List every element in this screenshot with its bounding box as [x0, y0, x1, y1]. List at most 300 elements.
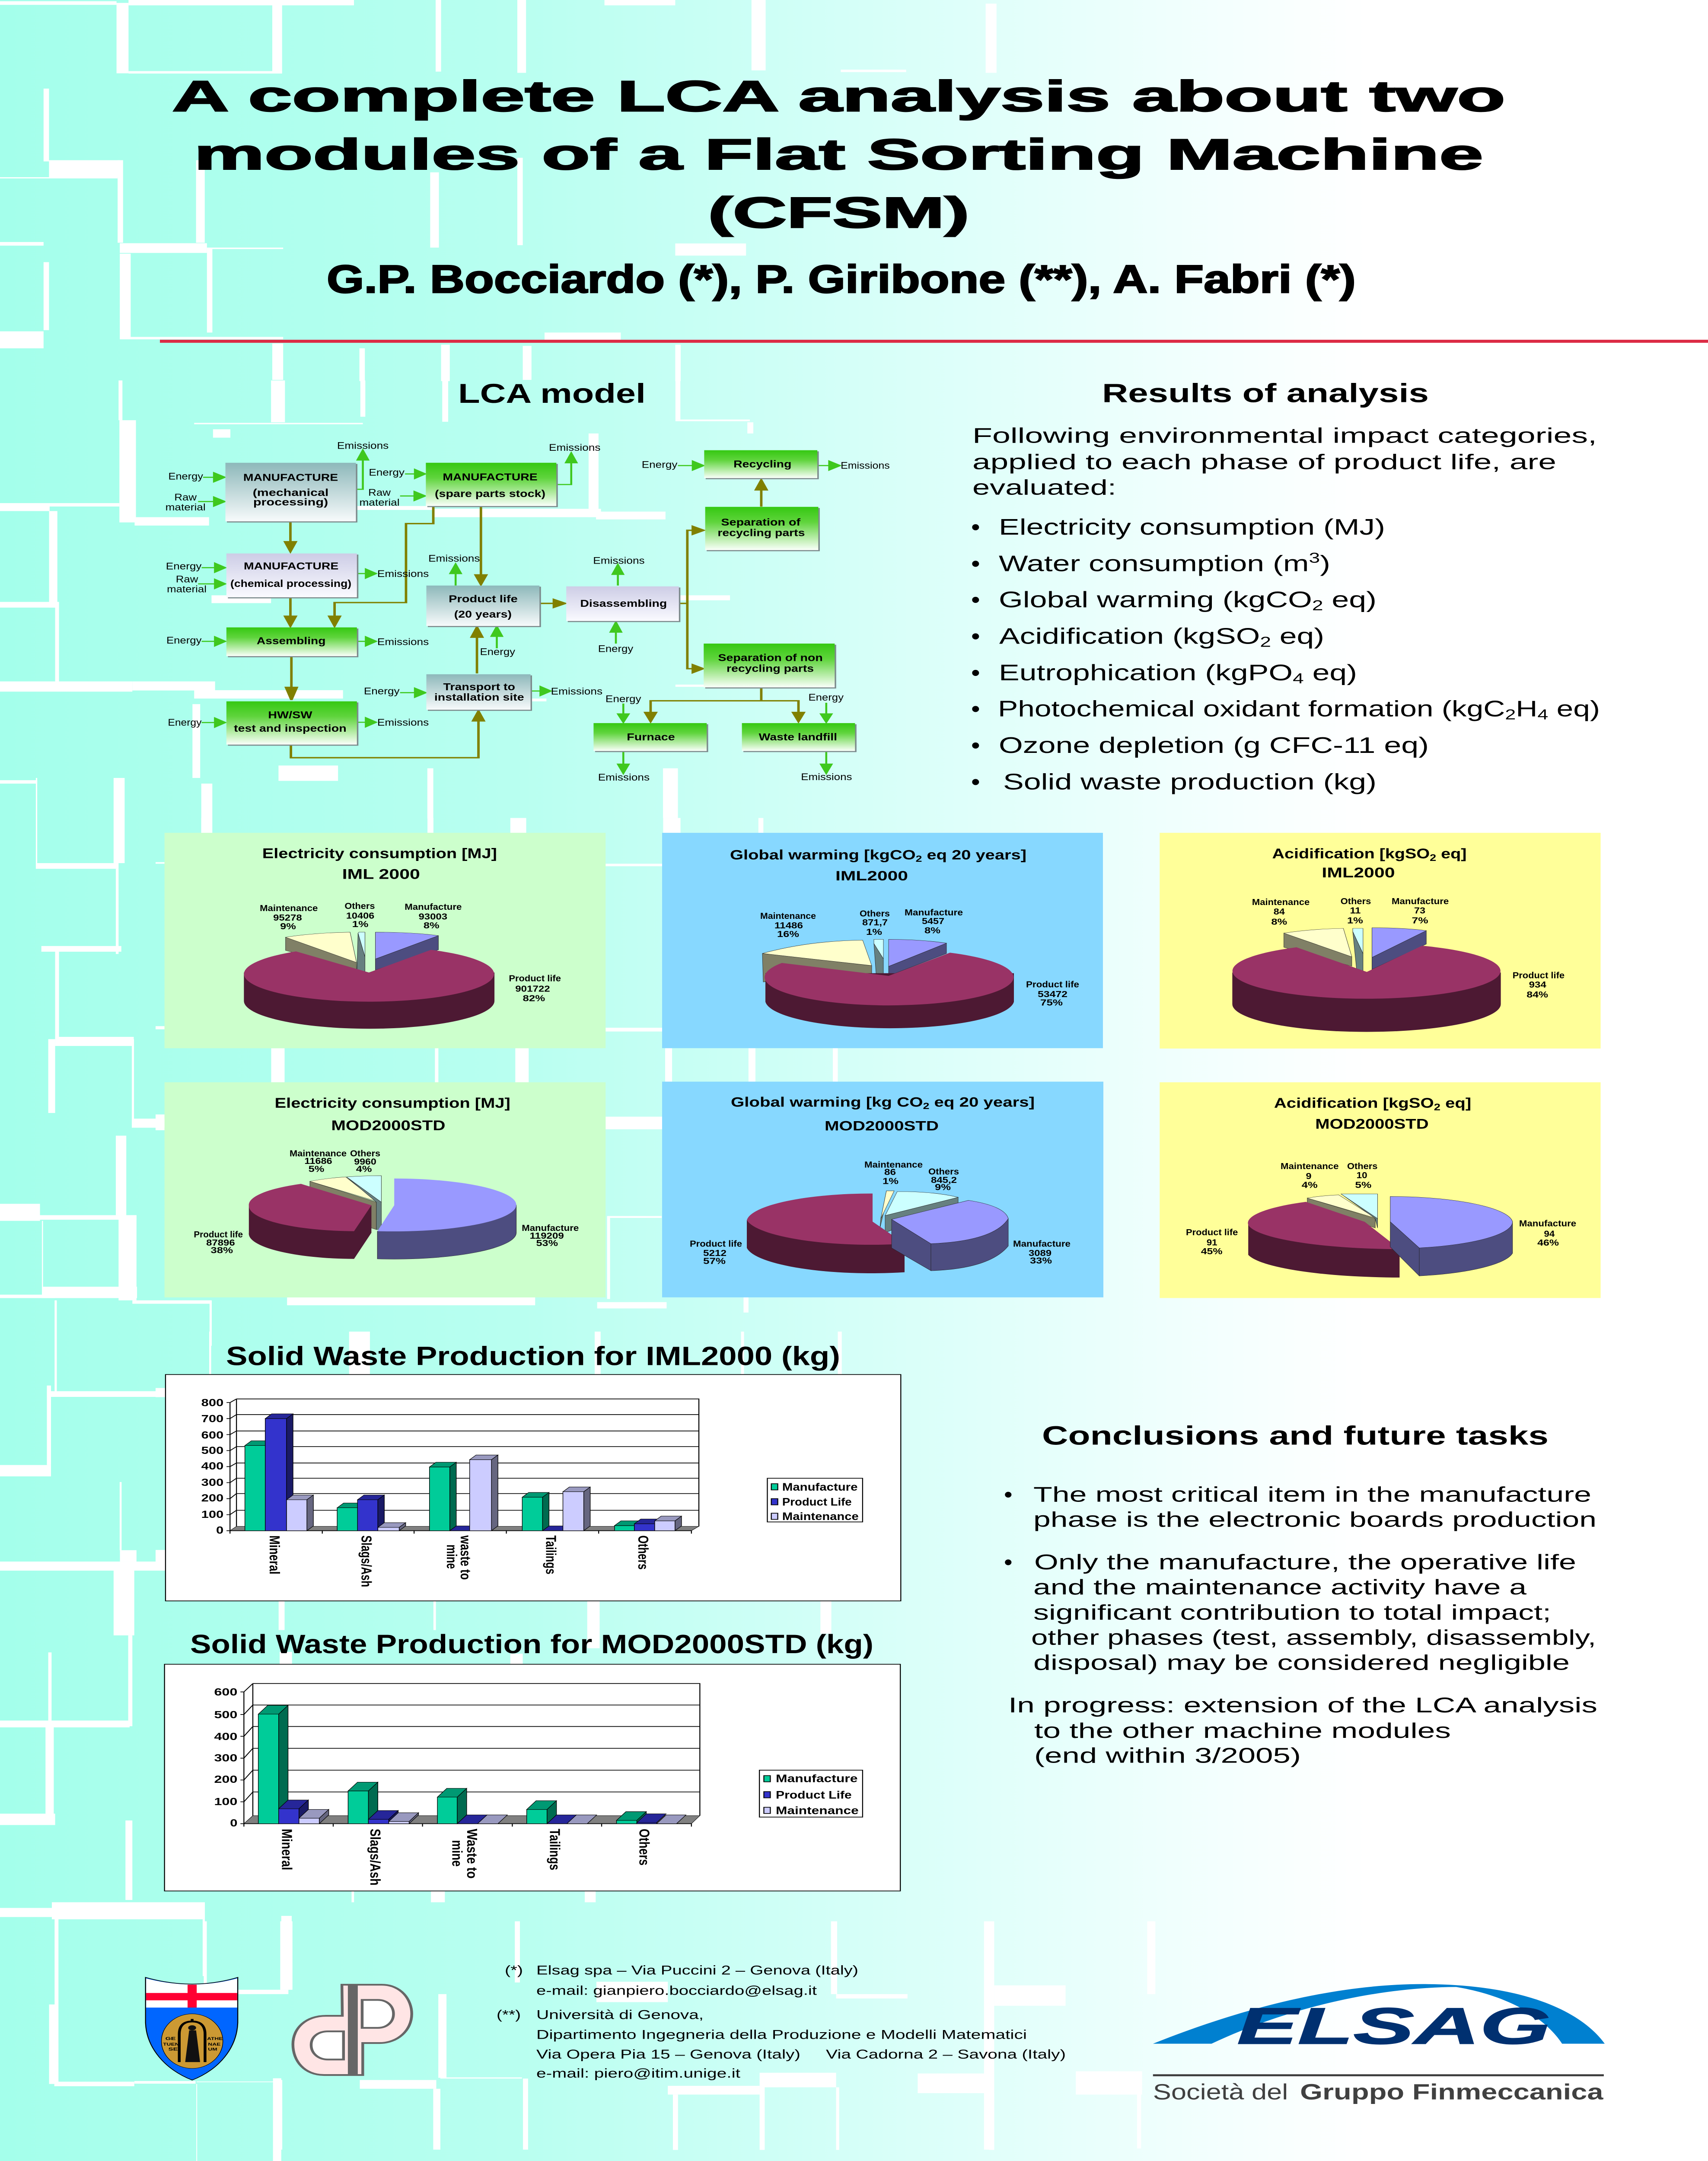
footer: affiliations: (**) — [497, 2008, 521, 2022]
legend: Product Life — [776, 1789, 852, 1801]
box: waste landfill: Waste landfill — [759, 732, 837, 743]
footer: affiliations: Elsag spa – Via Puccini 2 – Genova (Italy) — [536, 1963, 858, 1977]
data labels: 9 — [1306, 1172, 1312, 1181]
box: transport — [427, 674, 532, 711]
bar chart: solid waste IML2000 — [166, 1374, 901, 1601]
category labels: Mineral — [266, 1536, 282, 1575]
panel: global warming MOD2000STD — [662, 1082, 1103, 1297]
box: transport: installation site — [434, 692, 524, 703]
legend: Manufacture — [782, 1481, 857, 1493]
flow labels: energy and raw material: material — [166, 502, 206, 513]
bars: maintenance — [299, 1810, 686, 1823]
arrow: transport emissions — [531, 687, 551, 695]
box: manufacture mechanical — [226, 463, 357, 523]
panel: results of analysis — [971, 378, 1600, 794]
conclusions text: disposal) may be considered negligible — [1033, 1651, 1570, 1675]
logo: university of Genova shield: NAE — [208, 2043, 221, 2046]
impact category list: • — [971, 587, 980, 612]
conclusions text: and the maintenance activity have a — [1033, 1575, 1527, 1599]
y axis labels: 800 — [201, 1397, 223, 1409]
panel: electricity MOD2000STD — [165, 1082, 605, 1297]
data labels: Maintenance — [864, 1160, 923, 1170]
arrow: energy to chemical manufacture — [201, 563, 226, 572]
category labels: mine — [449, 1840, 465, 1867]
impact category list: • — [971, 733, 980, 758]
flowchart: LCA model — [166, 440, 890, 783]
chart title: IML 2000 — [342, 867, 420, 882]
y axis labels — [214, 1686, 237, 1829]
title: modules of a Flat Sorting Machine — [194, 130, 1483, 178]
footer: affiliations: Università di Genova, — [536, 2008, 704, 2022]
logo: ELSAG: ELSAG — [1237, 1997, 1551, 2055]
category labels: mine — [443, 1545, 459, 1569]
data labels — [1252, 896, 1565, 1000]
box: separation of non recycling parts: Separation of non — [718, 653, 823, 663]
data labels: 871,7 — [862, 917, 888, 928]
category labels: Mineral — [279, 1829, 294, 1870]
flow labels: energy and raw material: Energy — [808, 692, 844, 703]
legend — [767, 1478, 863, 1523]
y axis labels: 200 — [201, 1492, 223, 1504]
data labels — [194, 1148, 579, 1255]
box: separation of recycling parts — [705, 507, 820, 551]
impact category list: • — [971, 769, 980, 794]
panel: global warming IML2000 — [662, 833, 1103, 1048]
data labels: 84 — [1274, 907, 1285, 917]
category labels: Others — [636, 1829, 652, 1865]
flow labels: energy and raw material: Energy — [605, 694, 641, 704]
data labels: 1% — [883, 1176, 899, 1186]
data labels: Others — [1347, 1161, 1377, 1171]
impact category list: Ozone depletion (g CFC-11 eq) — [999, 733, 1429, 758]
category labels: Others — [635, 1536, 651, 1570]
flow labels: energy and raw material: Energy — [166, 635, 202, 646]
data labels: Others — [860, 908, 890, 918]
box: disassembling — [566, 586, 680, 622]
box: hardware test: HW/SW — [268, 710, 312, 721]
data labels: 8% — [924, 925, 940, 935]
impact category list: 4 — [1293, 670, 1304, 686]
arrow: energy to assembling — [201, 637, 226, 646]
heading: results of analysis: Results of analysis — [1102, 378, 1429, 408]
arrow: transport to product life — [472, 627, 482, 673]
chart title: IML2000 — [1322, 865, 1395, 880]
box: recycling — [704, 450, 819, 479]
data labels: 934 — [1529, 980, 1546, 990]
flow labels: emissions: Emissions — [593, 555, 645, 566]
data labels: 4% — [1302, 1180, 1318, 1190]
logo: ELSAG — [1153, 1984, 1605, 2104]
category labels: Slags/Ash — [358, 1536, 374, 1587]
data labels: Maintenance — [290, 1148, 347, 1158]
data labels: 8% — [424, 921, 440, 931]
chart title — [730, 848, 1026, 883]
data labels: Maintenance — [1252, 898, 1310, 907]
conclusions text: In progress: extension of the LCA analysis — [1008, 1693, 1597, 1717]
data labels: 33% — [1030, 1256, 1052, 1265]
data labels — [1186, 1161, 1576, 1256]
arrow: chemical manufacture to assembling — [285, 597, 296, 626]
legend: Maintenance — [782, 1511, 859, 1523]
conclusions text: • — [1004, 1550, 1013, 1574]
chart title: eq] — [1436, 846, 1466, 861]
bars: product life — [279, 1800, 666, 1823]
data labels: 5% — [309, 1164, 324, 1174]
pie chart — [747, 1191, 1008, 1273]
chart title: 2 — [916, 854, 922, 864]
chart title: eq 20 years] — [929, 1095, 1035, 1110]
data labels: 82% — [523, 993, 545, 1003]
data labels: 10406 — [346, 911, 374, 921]
data labels: Product life — [509, 973, 561, 983]
box: manufacture mechanical: (mechanical — [253, 487, 328, 498]
data labels: Product life — [194, 1230, 243, 1240]
data labels: Manufacture — [1519, 1219, 1576, 1228]
footer: affiliations — [497, 1963, 1066, 2081]
box: separation of recycling parts: Separation of — [721, 517, 801, 528]
data labels: 46% — [1537, 1238, 1559, 1248]
authors: G.P. Bocciardo (*), P. Giribone (**), A. Fabri (*) — [327, 257, 1356, 301]
impact category list: 4 — [1537, 707, 1548, 723]
data labels — [690, 1160, 1071, 1266]
chart title: MOD2000STD — [1315, 1116, 1429, 1132]
chart title: 2 — [1430, 852, 1436, 863]
data labels: 94 — [1544, 1229, 1555, 1239]
arrow: energy to recycling — [678, 461, 704, 470]
legend: Maintenance — [776, 1805, 859, 1817]
arrow: raw material to spare parts — [400, 491, 425, 500]
conclusions text — [1004, 1483, 1597, 1768]
y axis labels: 100 — [201, 1509, 223, 1520]
y axis labels: 0 — [216, 1524, 223, 1536]
intro text: evaluated: — [972, 475, 1116, 500]
chart title: Global warming [kgCO — [730, 848, 898, 863]
y axis labels: 500 — [214, 1709, 237, 1721]
heading: LCA model: LCA model — [458, 379, 646, 409]
flow labels: energy and raw material: Energy — [166, 561, 202, 571]
y axis labels: 600 — [201, 1430, 223, 1441]
chart title: eq 20 years] — [922, 848, 1026, 863]
arrow: energy to product life — [491, 627, 502, 648]
data labels: Manufacture — [1013, 1239, 1071, 1249]
data labels: 119209 — [530, 1231, 564, 1241]
box: manufacture mechanical: processing) — [253, 497, 328, 508]
flow labels: emissions: Emissions — [801, 771, 852, 782]
box: hardware test — [226, 701, 358, 746]
arrow: spare parts to assembling — [329, 506, 433, 626]
y axis labels: 100 — [214, 1796, 237, 1807]
logo: university of Genova shield: UM — [208, 2048, 217, 2052]
flow labels: energy and raw material: Energy — [480, 646, 515, 657]
chart title — [1274, 1095, 1471, 1132]
data labels: 53472 — [1038, 989, 1068, 999]
header rule — [160, 340, 1708, 343]
data labels: 11686 — [304, 1156, 332, 1166]
impact category list: eq) — [1271, 624, 1324, 649]
conclusions text: other phases (test, assembly, disassembly, — [1031, 1626, 1596, 1650]
flow labels: energy and raw material — [166, 459, 844, 728]
conclusions text: phase is the electronic boards production — [1033, 1508, 1596, 1532]
arrow: separation to recycling — [756, 480, 767, 507]
data labels: Maintenance — [760, 911, 816, 921]
y axis labels: 400 — [201, 1460, 223, 1472]
data labels: 84% — [1526, 990, 1548, 1000]
data labels: 9960 — [354, 1157, 376, 1167]
legend: Manufacture — [776, 1773, 857, 1785]
pie chart — [1248, 1194, 1513, 1278]
footer: affiliations: Via Opera Pia 15 – Genova (Italy) — [536, 2047, 800, 2062]
arrow: chemical manufacture emissions — [357, 569, 376, 578]
conclusions text: • — [1004, 1483, 1013, 1507]
box: manufacture spare parts: (spare parts stock) — [435, 488, 545, 500]
box: assembling — [226, 628, 358, 657]
box: manufacture mechanical: MANUFACTURE — [243, 472, 338, 483]
impact category list: Global warming (kgCO — [999, 587, 1257, 612]
box: separation of non recycling parts: recycling parts — [727, 663, 814, 674]
flow labels: energy and raw material: Energy — [168, 717, 202, 728]
arrow: energy to furnace — [618, 704, 629, 722]
box: product life — [427, 586, 541, 627]
arrow: assembling to test — [286, 656, 297, 700]
conclusions text: significant contribution to total impact; — [1033, 1600, 1551, 1625]
flow labels: emissions: Emissions — [377, 717, 429, 728]
data labels — [760, 907, 1079, 1007]
impact category list: Acidification (kgSO — [999, 624, 1214, 649]
impact category list: Eutrophication (kgPO — [999, 660, 1241, 685]
box: disassembling: Disassembling — [580, 598, 667, 609]
impact category list — [971, 514, 1600, 794]
arrow: assembling emissions — [357, 637, 376, 646]
data labels: 16% — [777, 929, 799, 939]
impact category list: Photochemical oxidant formation (kgC — [998, 696, 1429, 721]
title — [172, 72, 1505, 237]
logo: university of Genova shield: TUEN — [163, 2043, 179, 2046]
box: hardware test: test and inspection — [234, 723, 347, 734]
arrow: energy to landfill — [821, 703, 832, 722]
box: manufacture chemical: MANUFACTURE — [244, 561, 338, 572]
y axis labels: 700 — [201, 1413, 223, 1425]
y axis labels — [201, 1397, 223, 1536]
data labels: Manufacture — [1392, 896, 1449, 906]
data labels: 901722 — [515, 984, 550, 994]
chart title: Global warming [kg CO — [731, 1095, 903, 1110]
data labels: 87896 — [206, 1238, 235, 1248]
bars: manufacture — [258, 1705, 646, 1823]
data labels: 10 — [1357, 1171, 1367, 1180]
panel: acidification MOD2000STD — [1160, 1082, 1601, 1298]
data labels: 86 — [884, 1167, 896, 1177]
chart title: Electricity consumption [MJ] — [275, 1095, 510, 1111]
flow labels: emissions: Emissions — [598, 772, 650, 783]
arrow: disassembling to separation stages — [679, 526, 704, 673]
box: furnace — [593, 723, 708, 752]
flow labels: emissions — [337, 440, 890, 783]
data labels: 1% — [352, 919, 369, 929]
data labels: Others — [1341, 896, 1371, 906]
box: separation of recycling parts: recycling parts — [717, 527, 805, 539]
arrow: energy to disassembling — [610, 622, 621, 644]
flow labels: energy and raw material: material — [360, 497, 400, 508]
data labels: 1% — [1347, 916, 1363, 925]
impact category list: • — [971, 551, 980, 576]
flow labels: emissions: Emissions — [551, 686, 602, 697]
logo: university of Genova shield: SE — [169, 2046, 178, 2052]
bars: product life — [265, 1414, 661, 1531]
chart title — [1272, 846, 1466, 880]
y axis labels: 600 — [214, 1686, 237, 1698]
category labels — [266, 1535, 651, 1587]
data labels: Others — [344, 901, 375, 911]
flow labels: emissions: Emissions — [428, 553, 480, 564]
data labels: Manufacture — [905, 907, 963, 918]
data labels: 7% — [1412, 916, 1428, 925]
category labels: Tailings — [547, 1829, 562, 1870]
data labels: Maintenance — [260, 903, 318, 913]
arrow: separation of non recycling to furnace and landfill — [645, 687, 804, 721]
flow labels: energy and raw material: Energy — [598, 643, 633, 654]
data labels: 11 — [1350, 906, 1361, 915]
data labels: Maintenance — [1281, 1161, 1338, 1171]
flow labels: emissions: Emissions — [377, 636, 429, 647]
logo: university of Genova shield: ATHE — [207, 2037, 223, 2041]
data labels: Manufacture — [405, 902, 462, 912]
data labels: 53% — [536, 1238, 558, 1248]
logo: dP — [293, 1985, 412, 2075]
legend — [759, 1770, 863, 1817]
logo: university of Genova shield — [146, 1977, 238, 2080]
conclusions text: Only the manufacture, the operative life — [1034, 1550, 1576, 1574]
arrow: disassembling emissions — [612, 564, 623, 586]
y axis labels: 200 — [214, 1774, 237, 1785]
box: manufacture spare parts: MANUFACTURE — [443, 472, 538, 483]
panel: conclusions and future tasks — [1004, 1420, 1597, 1768]
data labels: 57% — [703, 1256, 726, 1266]
heading: conclusions: Conclusions and future tasks — [1042, 1420, 1549, 1450]
impact category list: • — [971, 696, 980, 721]
bar chart: solid waste MOD2000STD — [165, 1664, 900, 1891]
arrow: mechanical manufacture emissions — [356, 450, 368, 489]
category labels — [279, 1829, 652, 1886]
impact category list: • — [971, 514, 980, 539]
impact category list: eq) — [1304, 660, 1357, 685]
chart title: IML2000 — [835, 868, 908, 883]
data labels: Others — [928, 1167, 959, 1176]
chart title — [731, 1095, 1035, 1134]
chart title: Acidification [kgSO — [1274, 1095, 1464, 1111]
footer: affiliations: e-mail: piero@itim.unige.it — [536, 2066, 740, 2081]
chart title: 2 — [923, 1101, 929, 1111]
arrow: energy to transport — [400, 688, 426, 697]
impact category list: H — [1516, 696, 1537, 721]
flow labels: energy and raw material: Energy — [169, 471, 203, 481]
category labels: Waste to — [464, 1829, 479, 1879]
impact category list: 2 — [1260, 634, 1271, 650]
flow labels: energy and raw material: Raw — [368, 487, 391, 498]
title: (CFSM) — [708, 188, 969, 237]
y axis labels: 400 — [214, 1731, 237, 1743]
data labels: 4% — [356, 1164, 372, 1174]
category labels: Tailings — [542, 1536, 558, 1575]
heading: solid waste MOD2000STD: Solid Waste Production for MOD2000STD (kg) — [190, 1629, 873, 1659]
arrow: energy to mechanical manufacture — [203, 473, 225, 482]
flow labels: emissions: Emissions — [377, 568, 429, 579]
footer: affiliations: (*) — [505, 1963, 523, 1977]
data labels: 75% — [1040, 998, 1063, 1007]
data labels: Product life — [1186, 1228, 1238, 1237]
data labels: Product life — [690, 1239, 742, 1249]
arrow: spare parts emissions — [556, 453, 577, 484]
data labels: 3089 — [1029, 1248, 1052, 1258]
impact category list: 3 — [1309, 550, 1320, 566]
box: product life: Product life — [449, 593, 518, 605]
impact category list: 2 — [1505, 707, 1516, 723]
box: waste landfill — [742, 723, 857, 752]
flow labels: energy and raw material: Energy — [642, 459, 678, 470]
bars: maintenance — [287, 1455, 682, 1531]
data labels: 93003 — [418, 912, 447, 921]
data labels: Manufacture — [522, 1223, 579, 1233]
category labels: Slags/Ash — [367, 1829, 383, 1886]
panel: acidification IML2000 — [1160, 833, 1601, 1049]
data labels: Others — [350, 1148, 380, 1158]
data labels: Product life — [1026, 979, 1079, 989]
arrow: raw material to chemical manufacture — [198, 580, 226, 588]
impact category list: ) — [1320, 551, 1330, 576]
arrow: test emissions — [357, 718, 376, 727]
flow labels: energy and raw material: Raw — [174, 492, 197, 503]
box: manufacture spare parts — [426, 463, 558, 507]
data labels: 95278 — [273, 913, 302, 922]
bars: manufacture — [245, 1441, 641, 1531]
data labels: 845,2 — [931, 1175, 957, 1185]
arrow: raw material to mechanical manufacture — [198, 497, 225, 506]
footer: affiliations: Via Cadorna 2 – Savona (Italy) — [826, 2047, 1066, 2062]
conclusions text: to the other machine modules — [1034, 1719, 1451, 1743]
data labels: Product life — [1513, 971, 1565, 980]
data labels: 91 — [1207, 1238, 1217, 1247]
chart title — [262, 845, 497, 882]
heading: solid waste IML2000: Solid Waste Production for IML2000 (kg) — [226, 1341, 840, 1371]
data labels: 9% — [280, 921, 296, 931]
box: recycling: Recycling — [733, 459, 791, 470]
flow labels: energy and raw material: Raw — [176, 574, 198, 585]
flow labels: energy and raw material: Energy — [364, 685, 400, 696]
y axis labels: 300 — [214, 1753, 237, 1764]
intro text — [972, 424, 1597, 500]
flow labels: emissions: Emissions — [549, 442, 600, 453]
conclusions text: The most critical item in the manufacture — [1033, 1483, 1591, 1507]
data labels: 45% — [1201, 1246, 1223, 1256]
arrow: product life emissions — [450, 564, 461, 586]
impact category list: Water consumption (m — [999, 551, 1254, 576]
data labels: 38% — [210, 1245, 233, 1255]
box: furnace: Furnace — [627, 732, 675, 743]
pie chart — [762, 939, 1014, 1028]
chart title: MOD2000STD — [331, 1118, 445, 1133]
arrow: energy to spare parts — [405, 469, 425, 478]
title: A complete LCA analysis about two — [172, 72, 1505, 121]
pie chart — [1232, 928, 1501, 1032]
data labels: 5212 — [703, 1248, 727, 1258]
arrow: recycling emissions — [817, 461, 840, 470]
impact category list: eq) — [1323, 587, 1377, 612]
logo: university of Genova shield: GE — [166, 2036, 175, 2041]
category labels: waste to — [457, 1535, 473, 1580]
arrow: mechanical to chemical manufacture — [285, 521, 296, 551]
arrow: energy to test — [201, 718, 226, 727]
panel: electricity IML 2000 — [165, 833, 605, 1048]
box: manufacture chemical — [226, 554, 358, 598]
